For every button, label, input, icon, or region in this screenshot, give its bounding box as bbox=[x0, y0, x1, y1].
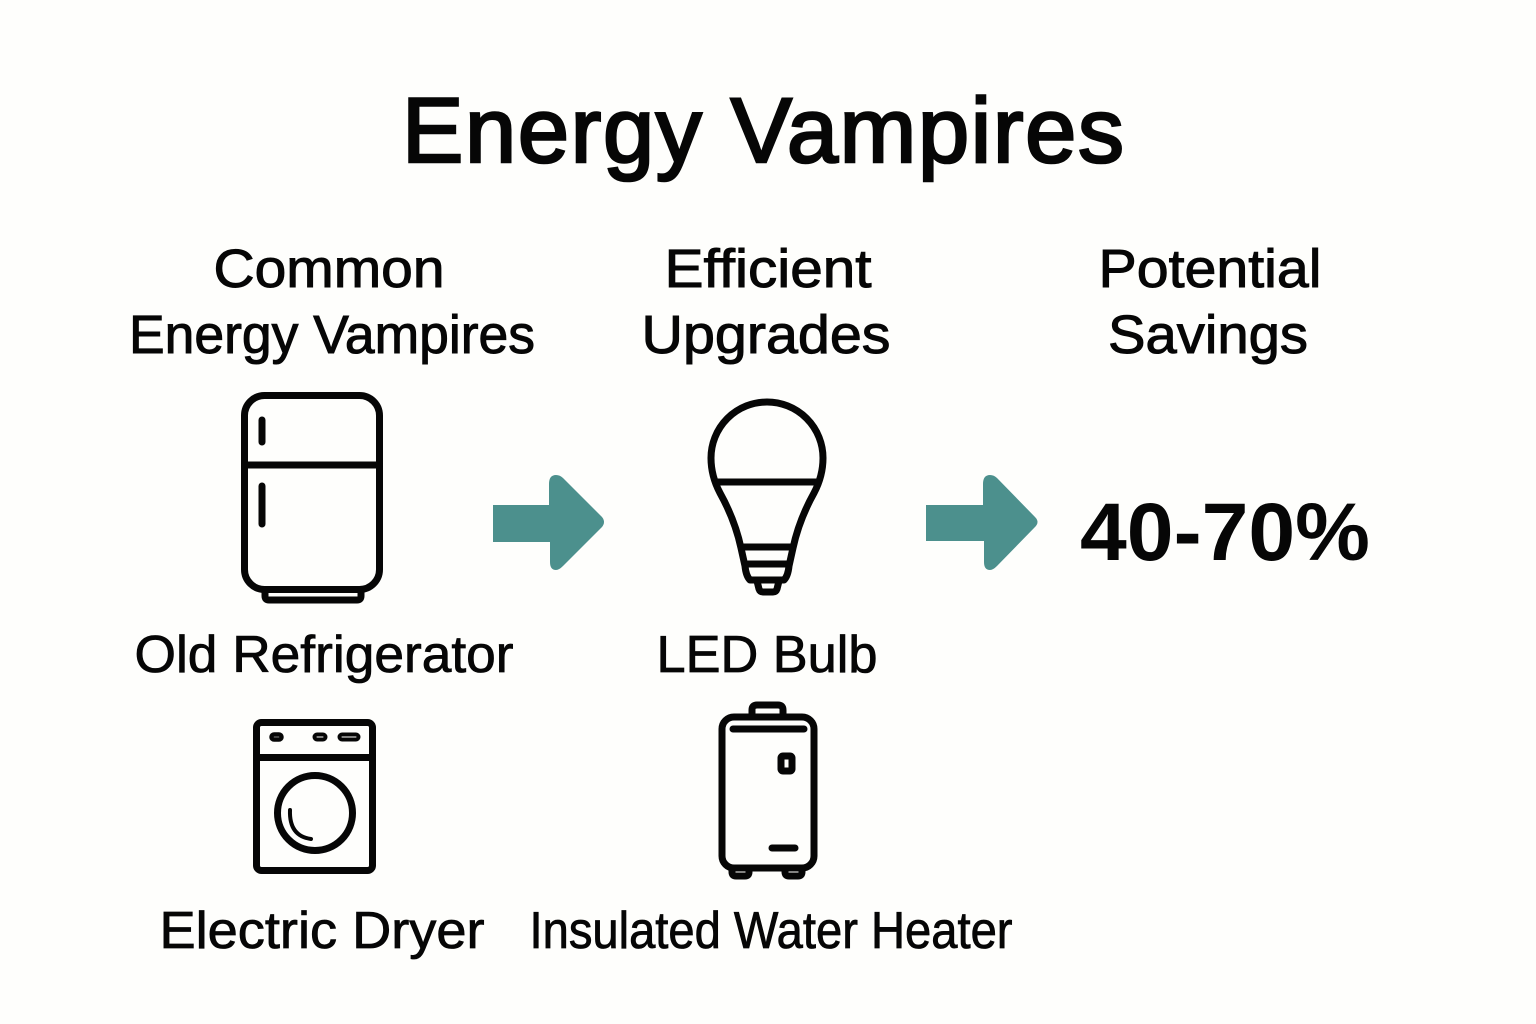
icon: insulated water heater bbox=[722, 705, 814, 876]
heading: efficient upgrades: Upgrades bbox=[642, 305, 890, 365]
heading: efficient upgrades: Efficient bbox=[664, 239, 872, 299]
heading: common energy vampires bbox=[129, 239, 535, 365]
arrow: bulb to savings bbox=[926, 475, 1038, 570]
heading: potential savings: Potential bbox=[1098, 239, 1322, 299]
label: old refrigerator: Old Refrigerator bbox=[134, 626, 514, 684]
arrow: refrigerator to bulb bbox=[493, 475, 604, 570]
heading: potential savings bbox=[1098, 239, 1322, 365]
label: led bulb: LED Bulb bbox=[656, 626, 878, 684]
heading: common energy vampires: Energy Vampires bbox=[129, 305, 535, 365]
icon: old refrigerator bbox=[244, 396, 380, 600]
icon: led bulb bbox=[711, 402, 823, 592]
title: Energy Vampires bbox=[402, 80, 1124, 182]
heading: potential savings: Savings bbox=[1108, 305, 1308, 365]
savings figure: 40-70% bbox=[1080, 487, 1370, 578]
label: electric dryer: Electric Dryer bbox=[160, 902, 484, 960]
icon: electric dryer bbox=[256, 722, 372, 870]
heading: common energy vampires: Common bbox=[214, 239, 444, 299]
label: insulated water heater: Insulated Water Heater bbox=[530, 902, 1012, 960]
heading: efficient upgrades bbox=[642, 239, 890, 365]
